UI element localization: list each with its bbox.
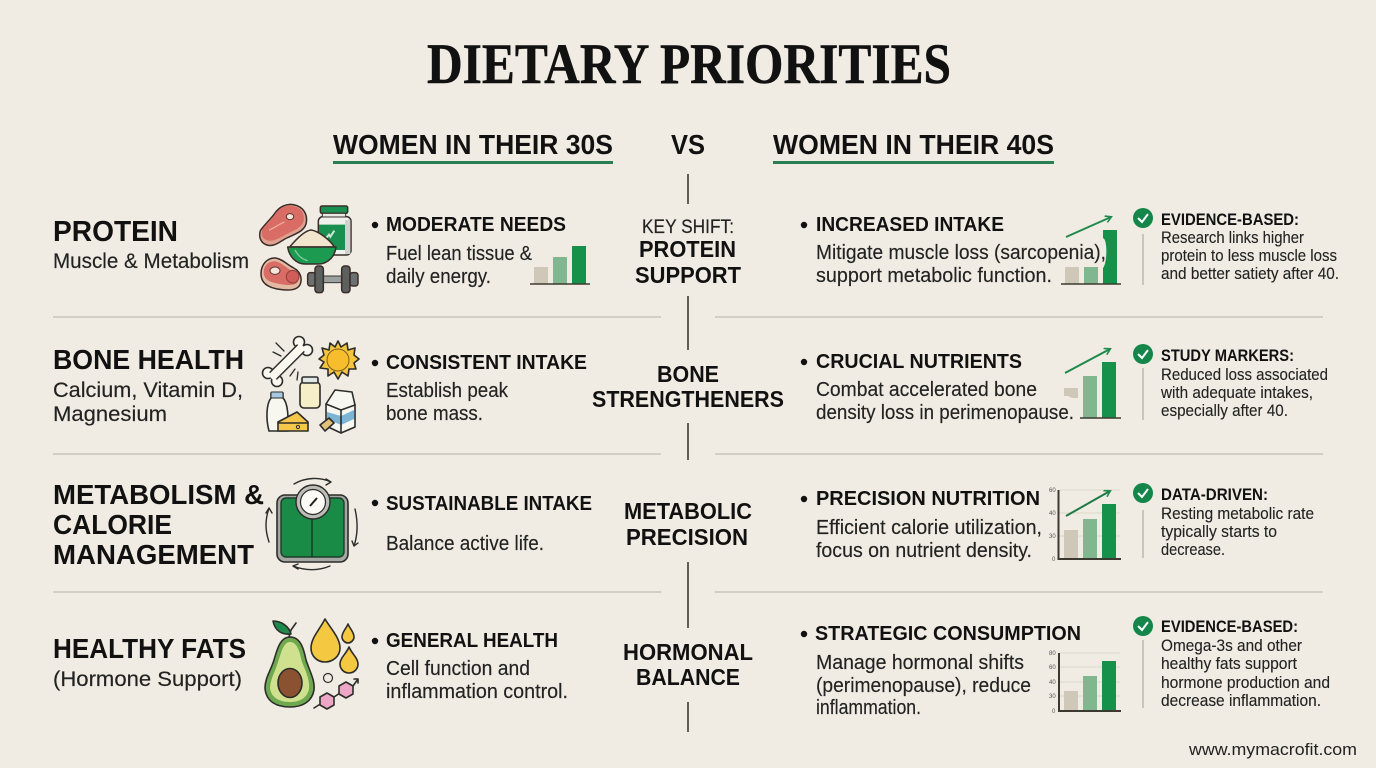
bar chart: 40s bone health with rising arrow	[1064, 349, 1121, 418]
evidence note: omega-3s: healthy fats support	[1161, 655, 1297, 673]
bar chart: 30s protein	[530, 246, 590, 284]
icon: avocado, oil drops, molecule	[265, 619, 358, 709]
bar chart: 40s healthy fats with axis: 0	[1052, 709, 1056, 715]
row: metabolism and calorie management	[53, 478, 1314, 570]
bar chart: 40s healthy fats with axis: 80	[1049, 651, 1056, 657]
row heading: bone health: BONE HEALTH	[53, 344, 244, 375]
shift label: hormonal balance: HORMONAL	[623, 639, 753, 665]
evidence note: study markers	[1133, 344, 1328, 420]
row heading: metabolism	[53, 479, 264, 570]
row: healthy fats	[53, 616, 1330, 719]
panel: 30s protein: MODERATE NEEDS	[386, 213, 566, 236]
row heading: healthy fats: HEALTHY FATS	[53, 633, 246, 664]
panel: 40s bone health: CRUCIAL NUTRIENTS	[816, 350, 1022, 373]
evidence note: research: protein to less muscle loss	[1161, 247, 1337, 265]
shift label: bone strengtheners: STRENGTHENERS	[592, 386, 784, 412]
evidence note: study markers: Reduced loss associated	[1161, 366, 1328, 384]
panel: 40s bone health: Combat accelerated bone	[816, 379, 1037, 401]
row heading: bone health: Magnesium	[53, 403, 167, 426]
website credit: www.mymacrofit.com	[1188, 740, 1357, 759]
evidence note: omega-3s: hormone production and	[1161, 674, 1330, 692]
panel: 30s protein: daily energy.	[386, 266, 491, 288]
panel: 40s protein: Mitigate muscle loss (sarcopenia),	[816, 242, 1106, 264]
panel: 30s protein	[372, 213, 566, 288]
shift label: bone strengtheners: BONE	[657, 361, 719, 387]
bar chart: 40s metabolism with axis and rising arrow: 0	[1052, 557, 1056, 563]
evidence note: study markers: with adequate intakes,	[1160, 384, 1313, 402]
row heading: metabolism: METABOLISM &	[53, 479, 264, 510]
panel: 40s metabolism: PRECISION NUTRITION	[816, 487, 1040, 510]
panel: 30s healthy fats: Cell function and	[386, 658, 530, 680]
panel: 40s bone health	[801, 350, 1074, 424]
panel: 40s metabolism: Efficient calorie utilization,	[816, 517, 1042, 539]
evidence note: research	[1133, 208, 1339, 285]
panel: 40s healthy fats: Manage hormonal shifts	[816, 652, 1024, 674]
panel: 30s healthy fats: GENERAL HEALTH	[386, 629, 558, 652]
key shift: protein support: PROTEIN	[639, 236, 736, 262]
panel: 40s protein: support metabolic function.	[816, 265, 1052, 287]
row heading: metabolism: MANAGEMENT	[53, 539, 254, 570]
evidence note: study markers: STUDY MARKERS:	[1161, 347, 1294, 365]
key shift: protein support: KEY SHIFT:	[642, 217, 734, 238]
shift label: hormonal balance: BALANCE	[636, 664, 740, 690]
evidence note: research: EVIDENCE-BASED:	[1161, 211, 1299, 229]
row: bone health	[53, 336, 1328, 433]
row heading: protein	[53, 216, 249, 273]
evidence note: research: and better satiety after 40.	[1161, 265, 1339, 283]
row heading: protein: PROTEIN	[53, 216, 178, 248]
row heading: healthy fats	[53, 633, 246, 691]
panel: 40s healthy fats	[801, 622, 1081, 719]
panel: 30s bone health: bone mass.	[386, 403, 483, 425]
evidence note: data-driven: Resting metabolic rate	[1161, 505, 1314, 523]
shift label: metabolic precision	[624, 498, 752, 550]
shift label: metabolic precision: PRECISION	[626, 524, 748, 550]
evidence note: data-driven: typically starts to	[1161, 523, 1277, 541]
key shift: protein support: SUPPORT	[635, 262, 741, 288]
panel: 40s healthy fats: STRATEGIC CONSUMPTION	[815, 622, 1081, 645]
panel: 30s metabolism	[372, 492, 592, 555]
bar chart: 40s metabolism with axis and rising arrow: 30	[1049, 534, 1056, 540]
row heading: metabolism: CALORIE	[53, 509, 172, 540]
panel: 40s healthy fats: inflammation.	[816, 697, 921, 719]
icon: steaks, protein jar, bowl, dumbbell	[260, 204, 358, 293]
shift label: hormonal balance	[623, 639, 753, 690]
panel: 40s protein	[801, 213, 1106, 287]
bar chart: 40s healthy fats with axis: 40	[1049, 680, 1056, 686]
panel: 40s protein: INCREASED INTAKE	[816, 213, 1004, 236]
bar chart: 40s healthy fats with axis: 30	[1049, 694, 1056, 700]
row heading: bone health: Calcium, Vitamin D,	[53, 379, 243, 402]
bar chart: 40s metabolism with axis and rising arrow: 60	[1049, 488, 1056, 494]
evidence note: research: Research links higher	[1161, 229, 1304, 247]
panel: 30s healthy fats	[372, 629, 568, 703]
row heading: protein: Muscle & Metabolism	[53, 250, 249, 273]
icon: weighing scale with cycle arrows	[266, 478, 358, 570]
panel: 40s metabolism: focus on nutrient density.	[816, 540, 1032, 562]
panel: 40s metabolism	[801, 487, 1042, 562]
evidence note: data-driven	[1133, 483, 1314, 559]
evidence note: data-driven: DATA-DRIVEN:	[1161, 486, 1268, 504]
evidence note: omega-3s: EVIDENCE-BASED:	[1161, 618, 1298, 636]
row heading: healthy fats: (Hormone Support)	[53, 668, 242, 691]
evidence note: omega-3s: decrease inflammation.	[1161, 692, 1321, 710]
panel: 30s bone health: CONSISTENT INTAKE	[386, 351, 587, 374]
panel: 40s bone health: density loss in perimenopause.	[816, 402, 1074, 424]
column header: women in their 30s: WOMEN IN THEIR 30S	[333, 129, 613, 160]
bar chart: 40s metabolism with axis and rising arrow	[1049, 488, 1121, 563]
key shift: protein support	[635, 217, 741, 288]
panel: 30s protein: Fuel lean tissue &	[386, 243, 533, 265]
shift label: bone strengtheners	[592, 361, 784, 412]
bar chart: 40s protein with rising arrow	[1061, 217, 1121, 284]
panel: 30s bone health: Establish peak	[386, 380, 509, 402]
shift label: metabolic precision: METABOLIC	[624, 498, 752, 524]
title: DIETARY PRIORITIES	[427, 33, 951, 96]
column header: women in their 40s: WOMEN IN THEIR 40S	[773, 129, 1054, 160]
panel: 30s healthy fats: inflammation control.	[386, 681, 568, 703]
row: protein	[53, 204, 1339, 293]
bar chart: 40s healthy fats with axis	[1049, 651, 1121, 715]
evidence note: omega-3s: Omega-3s and other	[1161, 637, 1302, 655]
icon: bone, sun, milk and cheese	[262, 336, 359, 433]
evidence note: omega-3s	[1133, 616, 1330, 710]
evidence note: study markers: especially after 40.	[1161, 402, 1288, 420]
row heading: bone health	[53, 344, 244, 426]
panel: 30s metabolism: Balance active life.	[386, 533, 544, 555]
column header: vs: VS	[671, 129, 705, 160]
panel: 40s healthy fats: (perimenopause), reduce	[816, 675, 1031, 697]
panel: 30s bone health	[372, 351, 587, 425]
evidence note: data-driven: decrease.	[1161, 541, 1225, 559]
bar chart: 40s metabolism with axis and rising arrow: 40	[1049, 511, 1056, 517]
bar chart: 40s healthy fats with axis: 60	[1049, 665, 1056, 671]
panel: 30s metabolism: SUSTAINABLE INTAKE	[386, 492, 592, 515]
